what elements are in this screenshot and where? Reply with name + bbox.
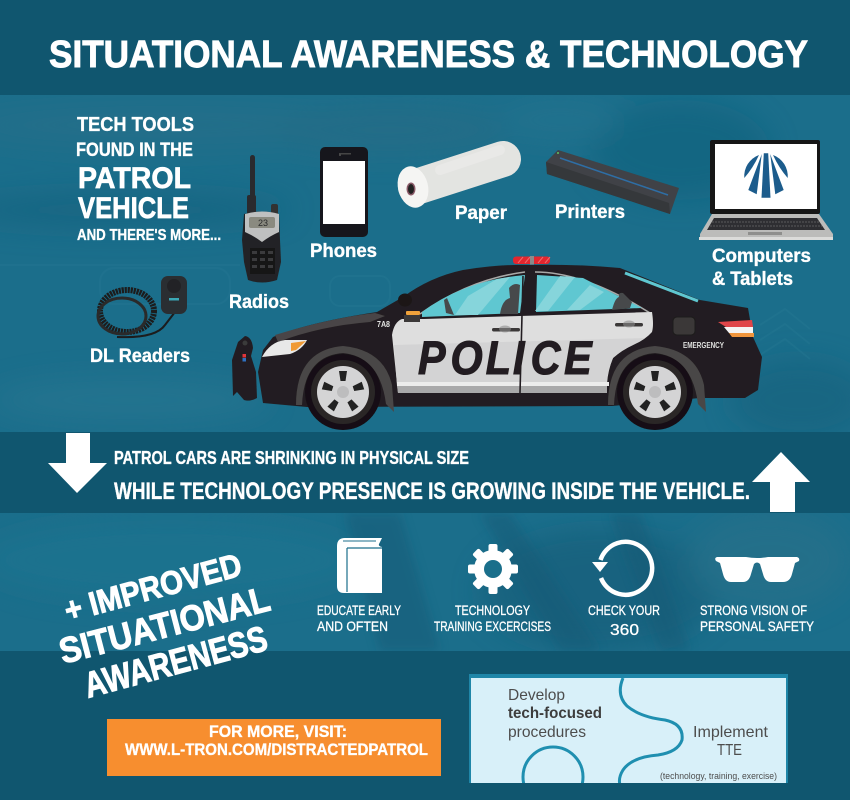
icon: radio: [242, 155, 281, 282]
front wheel: [296, 346, 394, 430]
text: check your 360: CHECK YOUR: [588, 603, 660, 618]
label: Printers: Printers: [555, 202, 625, 223]
icon: printer: [546, 150, 679, 214]
icon: sunglasses: [715, 557, 799, 582]
car body: [258, 265, 762, 407]
white door panels: [392, 312, 653, 393]
callout: visit link: [107, 719, 441, 776]
puzzle connector: [619, 678, 682, 785]
heading: improved situational awareness: [55, 546, 274, 706]
heading: tech tools: TECH TOOLS: [77, 114, 194, 136]
icon: phone: [320, 147, 368, 237]
text: implement TTE: Implement: [693, 724, 769, 741]
icon: radio: 23: [258, 218, 268, 228]
callout: visit link: WWW.L-TRON.COM/DISTRACTEDPATROL: [125, 740, 428, 759]
text: develop procedures: Develop: [508, 687, 565, 704]
heading: improved situational awareness: AWARENESS: [79, 617, 272, 706]
text: implement TTE: TTE: [717, 742, 742, 759]
label: Phones: Phones: [310, 241, 377, 262]
emergency light bar: [513, 256, 550, 264]
text: check your 360: [588, 603, 660, 639]
heading: tech tools: PATROL: [78, 162, 191, 195]
text: implement TTE: (technology, training, exercise): [660, 771, 777, 781]
fuel door: [673, 317, 695, 335]
heading: tech tools: [76, 114, 221, 244]
police car: [258, 256, 762, 430]
heading: tech tools: FOUND IN THE: [76, 140, 193, 161]
text: educate early: [317, 603, 401, 634]
text: 7A8: 7A8: [377, 320, 390, 329]
text: technology training: TECHNOLOGY: [455, 603, 530, 618]
text: patrol cars shrinking: PATROL CARS ARE SHRINKING IN PHYSICAL SIZE: [114, 448, 469, 468]
heading: improved situational awareness: + IMPROVED: [60, 546, 246, 629]
text: strong vision: [700, 603, 814, 634]
panel: message band: [0, 432, 850, 513]
rear wheel: [608, 346, 706, 430]
icon: laptop: [699, 140, 833, 240]
label: DL Readers: DL Readers: [90, 346, 190, 367]
icon: book: [337, 538, 382, 593]
label: Computers & Tablets: [712, 246, 811, 290]
icon: circular arrow: [592, 542, 652, 595]
text: technology training: TRAINING EXCERCISES: [434, 619, 551, 634]
text: develop procedures: tech-focused: [508, 705, 602, 722]
text: implement TTE: [660, 724, 777, 781]
panel: footer band: [0, 651, 850, 800]
text: educate early: EDUCATE EARLY: [317, 603, 401, 618]
label: Paper: Paper: [455, 203, 508, 224]
text: POLICE: POLICE: [418, 333, 593, 385]
text: develop procedures: procedures: [508, 724, 586, 741]
text: technology training: [434, 603, 551, 634]
panel: header band: [0, 0, 850, 95]
label: Radios: Radios: [229, 292, 289, 313]
arrow: up: [752, 452, 810, 512]
text: develop procedures: [508, 687, 602, 741]
text: strong vision: PERSONAL SAFETY: [700, 619, 814, 634]
label: Computers & Tablets: & Tablets: [712, 269, 793, 290]
icon: push bumper: [232, 336, 257, 401]
text: EMERGENCY: EMERGENCY: [683, 341, 725, 350]
panel: main blurred background: [0, 95, 850, 651]
text: educate early: AND OFTEN: [317, 619, 388, 634]
text: strong vision: STRONG VISION OF: [700, 603, 807, 618]
door handles: [492, 320, 643, 332]
heading: tech tools: VEHICLE: [78, 192, 189, 225]
windows: [422, 273, 698, 317]
icon: company logo: [744, 153, 788, 198]
callout: visit link: FOR MORE, VISIT:: [209, 722, 347, 741]
headlight: [262, 340, 307, 357]
label: Computers & Tablets: Computers: [712, 246, 811, 267]
panel: puzzle diagram: [469, 674, 788, 783]
heading: tech tools: AND THERE'S MORE...: [77, 227, 221, 244]
tail light: [718, 320, 754, 337]
arrow: down: [48, 433, 107, 493]
icon: gear: [468, 544, 518, 594]
heading: improved situational awareness: SITUATIONAL: [55, 578, 274, 672]
text: check your 360: 360: [610, 622, 639, 639]
icon: DL reader: [98, 276, 187, 337]
title: SITUATIONAL AWARENESS & TECHNOLOGY: [49, 34, 808, 76]
puzzle arc: [522, 746, 584, 783]
icon: paper roll: [393, 150, 503, 211]
mirror: [398, 294, 420, 322]
